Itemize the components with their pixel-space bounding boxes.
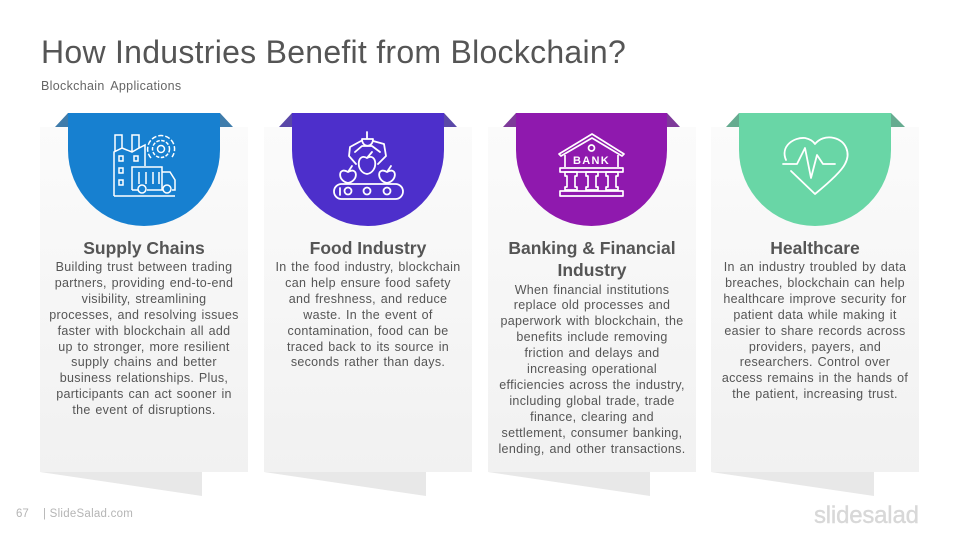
text: supply chains body: supply chains and better: [71, 355, 217, 369]
title: How Industries Benefit from Blockchain?: [41, 34, 626, 70]
panel: food industry card: [264, 113, 472, 496]
text: healthcare body: the patient, increasing trust.: [732, 387, 898, 401]
heading: Healthcare: Healthcare: [770, 238, 860, 258]
text: food industry body: waste. In the event of: [303, 308, 433, 322]
text: supply chains body: participants can act sooner in: [56, 387, 232, 401]
text: banking body: replace old processes and: [514, 298, 670, 312]
text: healthcare body: breaches, blockchain can help: [725, 276, 905, 290]
text: banking body: friction and delays and: [524, 346, 659, 360]
text: food industry body: traced back to its source in: [287, 340, 449, 354]
text: supply chains body: faster with blockchain all add: [58, 324, 230, 338]
panel: banking card: [488, 113, 696, 496]
heading: Banking & Financial Industry: [508, 238, 676, 280]
text: healthcare body: easier to share records across: [724, 324, 906, 338]
text: healthcare body: patient data while making it: [733, 308, 897, 322]
text: banking body: paperwork with blockchain, the: [501, 314, 683, 328]
text: banking body: [498, 282, 686, 456]
text: banking body: benefits include removing: [516, 330, 668, 344]
text: healthcare body: In an industry troubled by data: [724, 260, 906, 274]
text: supply chains body: [49, 260, 239, 417]
logo: slidesalad: slidesalad: [814, 502, 919, 528]
text: supply chains body: business relationships. Plus,: [60, 371, 228, 385]
label: BANK: BANK: [573, 155, 610, 167]
text: banking body: lending, and other transactions.: [498, 442, 686, 456]
text: supply chains body: partners, providing end-to-end: [55, 276, 233, 290]
text: food industry body: can help ensure food safety: [285, 276, 451, 290]
text: food industry body: [276, 260, 460, 369]
text: banking body: settlement, consumer banking,: [502, 426, 682, 440]
text: supply chains body: processes, and resolving issues: [49, 308, 239, 322]
panel: healthcare card: [711, 113, 919, 496]
text: banking body: including global trade, trade: [509, 394, 675, 408]
text: food industry body: seconds rather than days.: [291, 355, 445, 369]
panel: supply chains card: [40, 113, 248, 496]
heading: Banking & Financial Industry: Industry: [557, 260, 627, 280]
heading: Supply Chains: Supply Chains: [83, 238, 205, 258]
text: supply chains body: visibility, streamlining: [82, 292, 206, 306]
icon: factory, gear and truck: [114, 135, 175, 196]
footer: SlideSalad.com: | SlideSalad.com: [43, 508, 133, 520]
page number: 67: [16, 508, 29, 520]
text: food industry body: and freshness, and reduce: [289, 292, 447, 306]
heading: Banking & Financial Industry: Banking & Financial: [508, 238, 676, 258]
text: healthcare body: providers, payers, and: [749, 340, 881, 354]
text: banking body: finance, clearing and: [530, 410, 654, 424]
heading: Food Industry: Food Industry: [310, 238, 426, 258]
text: food industry body: In the food industry, blockchain: [276, 260, 460, 274]
text: healthcare body: healthcare improve security for: [723, 292, 907, 306]
text: healthcare body: access remains in the hands of: [722, 371, 908, 385]
text: healthcare body: [722, 260, 908, 401]
subtitle: Blockchain Applications: [41, 79, 182, 93]
text: food industry body: contamination, food can be: [288, 324, 448, 338]
text: supply chains body: up to stronger, more resilient: [58, 340, 230, 354]
icon: apples on conveyor: [334, 132, 403, 199]
text: banking body: When financial institutions: [515, 282, 669, 296]
text: healthcare body: researchers. Control over: [740, 355, 890, 369]
text: supply chains body: Building trust between trading: [56, 260, 232, 274]
text: banking body: increasing operational: [527, 362, 657, 376]
icon: bank building: [559, 134, 624, 196]
text: banking body: efficiencies across the industry,: [499, 378, 685, 392]
text: supply chains body: the event of disruptions.: [72, 403, 216, 417]
icon: heart with pulse: [783, 137, 848, 194]
